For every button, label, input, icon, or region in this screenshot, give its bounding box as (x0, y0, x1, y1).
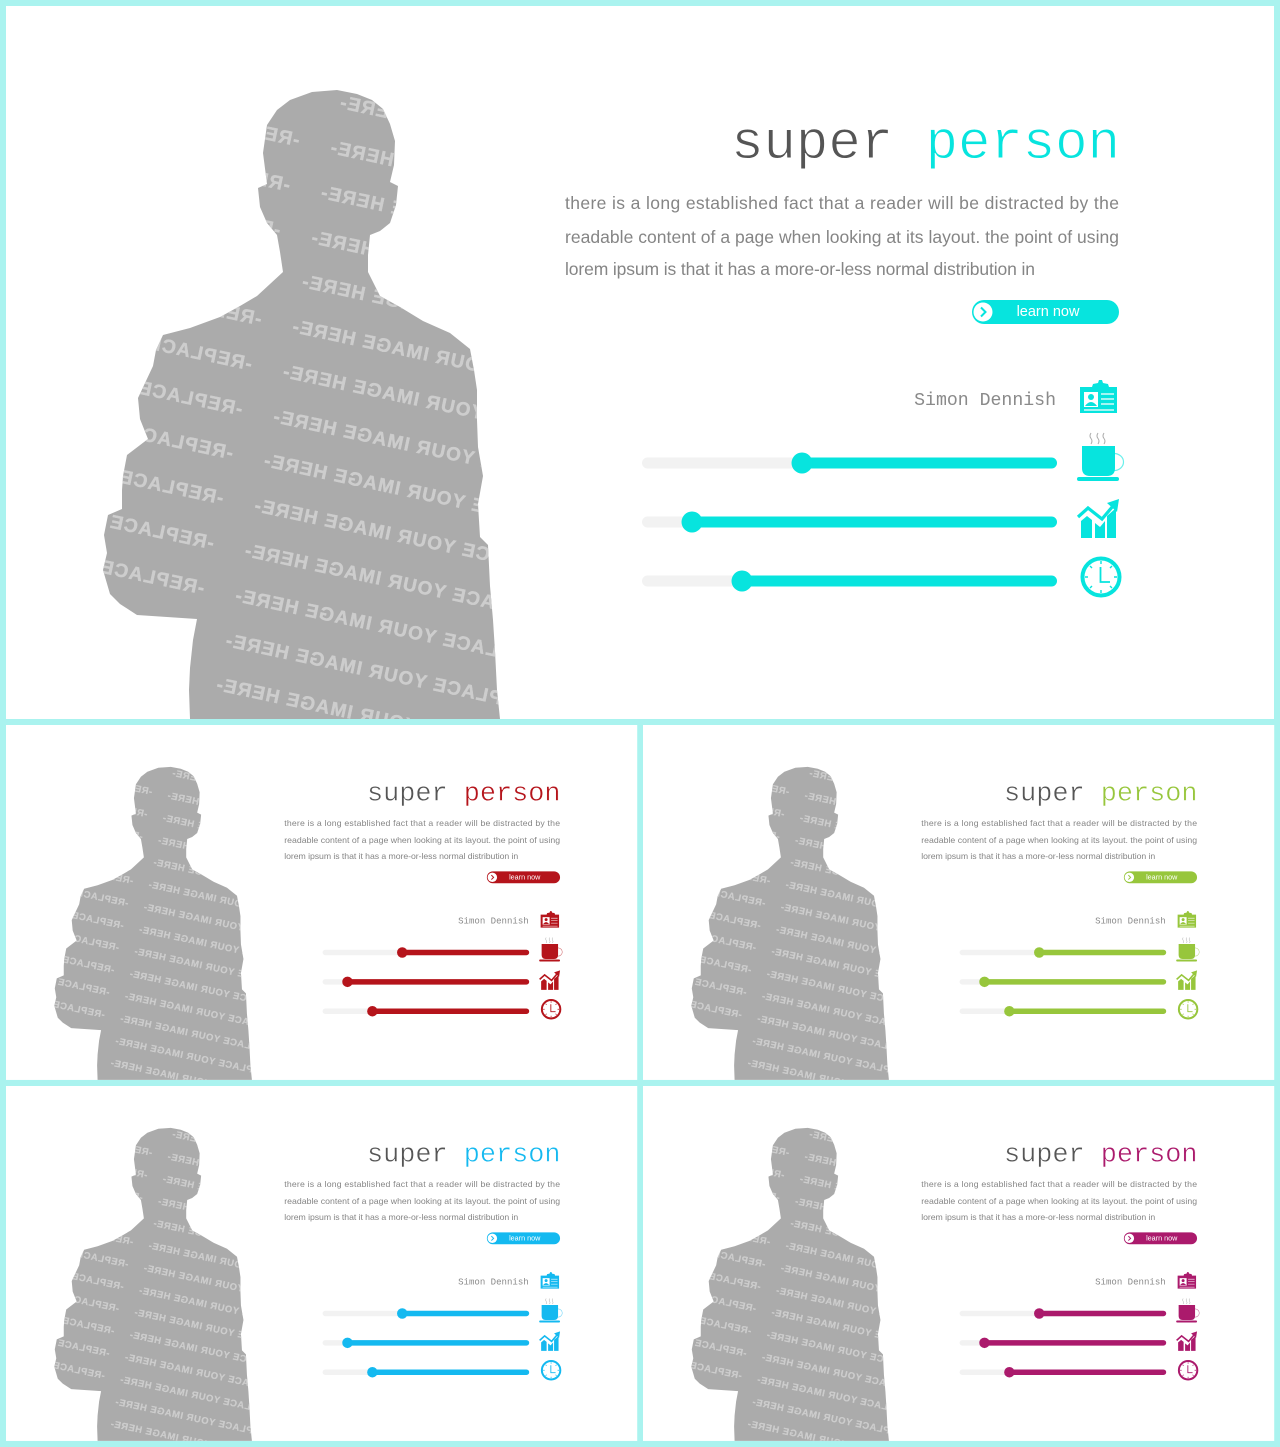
panel background (6, 6, 1274, 719)
silhouette placeholder: -REPLACE YOUR IMAGE HERE- (152, 857, 309, 901)
silhouette placeholder: -REPLACE (698, 954, 752, 976)
silhouette placeholder: -REPLACE YOUR IMAGE HERE- (171, 1129, 328, 1173)
silhouette placeholder: -REPLACE (61, 954, 115, 976)
silhouette placeholder: -REPLACE YOUR IMAGE HERE- (270, 406, 587, 493)
icon: coffee cup (539, 938, 562, 961)
silhouette placeholder: -REPLACE YOUR IMAGE HERE- (156, 1196, 314, 1240)
silhouette placeholder: -REPLACE (145, 333, 254, 375)
slider 1 (323, 947, 529, 958)
description text (921, 818, 1197, 861)
silhouette placeholder: -REPLACE YOUR IMAGE HERE- (119, 1374, 276, 1418)
silhouette placeholder: -REPLACE (136, 378, 244, 420)
icon: id badge (1178, 911, 1196, 928)
silhouette placeholder: -REPLACE (689, 999, 743, 1021)
slider 3 (642, 570, 1057, 592)
silhouette placeholder: -REPLACE (183, 154, 292, 196)
slider 2 (323, 1338, 529, 1348)
description text (565, 193, 1119, 279)
silhouette placeholder: -REPLACE (693, 1338, 748, 1359)
silhouette placeholder: -REPLACE (80, 865, 134, 887)
icon: id badge (541, 911, 559, 928)
silhouette placeholder (103, 90, 500, 719)
description text: lorem ipsum is that it has a more-or-less normal distribution in (565, 259, 1035, 279)
icon: growth chart (540, 970, 560, 990)
silhouette placeholder: -REPLACE (94, 1159, 148, 1181)
slider 1 (323, 1308, 529, 1319)
silhouette placeholder: -REPLACE YOUR IMAGE HERE- (784, 1240, 941, 1284)
description text: lorem ipsum is that it has a more-or-less normal distribution in (284, 851, 518, 861)
silhouette placeholder: -REPLACE YOUR IMAGE HERE- (793, 1196, 951, 1240)
silhouette placeholder: -REPLACE (164, 243, 273, 285)
description text: readable content of a page when looking at its layout. the point of using (284, 1196, 560, 1206)
silhouette placeholder: -REPLACE YOUR IMAGE HERE- (161, 1174, 318, 1217)
silhouette placeholder: -REPLACE YOUR IMAGE HERE- (128, 968, 285, 1012)
panel background (643, 725, 1274, 1080)
silhouette placeholder: -REPLACE (726, 821, 781, 843)
silhouette placeholder: -REPLACE YOUR IMAGE HERE- (147, 879, 304, 923)
name: Simon Dennish (1095, 1277, 1166, 1288)
title: super person (1004, 780, 1198, 810)
silhouette placeholder: -REPLACE (56, 977, 111, 998)
silhouette placeholder (54, 1128, 252, 1441)
silhouette placeholder: -REPLACE (736, 776, 790, 798)
silhouette placeholder: -REPLACE (736, 1137, 790, 1159)
description text (284, 818, 560, 861)
slider 1 (960, 1308, 1166, 1319)
silhouette placeholder: -REPLACE (693, 977, 748, 998)
icon: clock (542, 1000, 560, 1018)
silhouette placeholder: -REPLACE YOUR IMAGE HERE- (290, 316, 606, 403)
silhouette placeholder: -REPLACE (708, 910, 762, 932)
learn now button: learn now (1146, 1233, 1178, 1242)
silhouette placeholder: -REPLACE YOUR IMAGE HERE- (779, 1263, 937, 1306)
silhouette placeholder: -REPLACE (708, 1271, 762, 1293)
silhouette placeholder: -REPLACE (722, 843, 776, 865)
silhouette placeholder: -REPLACE (99, 1137, 153, 1159)
icon: id badge (1080, 380, 1117, 413)
silhouette placeholder: -REPLACE YOUR IMAGE HERE- (223, 630, 539, 717)
name: Simon Dennish (1095, 916, 1166, 927)
silhouette placeholder: -REPLACE YOUR IMAGE HERE- (793, 835, 951, 879)
silhouette placeholder: -REPLACE YOUR IMAGE HERE- (123, 1352, 281, 1396)
silhouette placeholder (691, 766, 889, 1080)
slider 3 (323, 1367, 529, 1377)
slider 1 (642, 452, 1057, 474)
panel: red slide (6, 725, 637, 1101)
panel background (6, 725, 637, 1080)
icon: coffee cup (1077, 433, 1124, 481)
silhouette placeholder: -REPLACE YOUR IMAGE HERE- (161, 813, 318, 856)
silhouette placeholder: -REPLACE (89, 1182, 144, 1204)
silhouette placeholder: -REPLACE (703, 1293, 757, 1315)
silhouette placeholder: -REPLACE (726, 1182, 781, 1204)
silhouette placeholder: -REPLACE YOUR IMAGE HERE- (213, 674, 530, 761)
icon: growth chart (1078, 499, 1119, 538)
silhouette placeholder: -REPLACE YOUR IMAGE HERE- (242, 540, 558, 627)
silhouette placeholder: -REPLACE YOUR IMAGE HERE- (765, 968, 922, 1012)
silhouette placeholder: -REPLACE YOUR IMAGE HERE- (798, 1174, 955, 1217)
description text: readable content of a page when looking at its layout. the point of using (565, 227, 1119, 247)
silhouette placeholder: -REPLACE (731, 798, 785, 820)
silhouette placeholder: -REPLACE (98, 557, 206, 599)
icon: coffee cup (539, 1299, 562, 1322)
silhouette placeholder: -REPLACE (155, 288, 264, 330)
silhouette placeholder: -REPLACE (52, 999, 106, 1021)
silhouette placeholder: -REPLACE (66, 1293, 120, 1315)
silhouette placeholder (54, 766, 252, 1080)
silhouette placeholder: -REPLACE YOUR IMAGE HERE- (775, 924, 932, 968)
silhouette placeholder: -REPLACE YOUR IMAGE HERE- (251, 495, 568, 582)
icon: clock (542, 1361, 560, 1379)
silhouette placeholder: -REPLACE YOUR IMAGE HERE- (318, 182, 634, 269)
silhouette placeholder: -REPLACE (117, 467, 226, 509)
silhouette placeholder: -REPLACE YOUR IMAGE HERE- (261, 450, 577, 537)
description text: lorem ipsum is that it has a more-or-less normal distribution in (921, 1212, 1155, 1222)
silhouette placeholder: -REPLACE YOUR IMAGE HERE- (156, 835, 314, 879)
silhouette placeholder: -REPLACE (107, 512, 216, 554)
silhouette placeholder: -REPLACE YOUR IMAGE HERE- (756, 1013, 913, 1057)
silhouette placeholder: -REPLACE YOUR IMAGE HERE- (232, 585, 549, 672)
silhouette placeholder: -REPLACE (126, 422, 235, 464)
silhouette placeholder: -REPLACE YOUR IMAGE HERE- (784, 879, 941, 923)
description text: lorem ipsum is that it has a more-or-less normal distribution in (284, 1212, 518, 1222)
description text (284, 1179, 560, 1222)
silhouette placeholder: -REPLACE YOUR IMAGE HERE- (138, 924, 295, 968)
learn now button: learn now (1146, 872, 1178, 881)
panel background (6, 1086, 637, 1441)
slider 2 (323, 977, 529, 987)
silhouette placeholder: -REPLACE YOUR IMAGE HERE- (803, 790, 960, 834)
silhouette placeholder: -REPLACE (75, 888, 129, 909)
icon: clock (1179, 1361, 1197, 1379)
description text: there is a long established fact that a reader will be distracted by the (284, 1179, 560, 1189)
silhouette placeholder: -REPLACE (717, 1226, 771, 1248)
silhouette placeholder: -REPLACE YOUR IMAGE HERE- (133, 946, 290, 990)
description text: readable content of a page when looking at its layout. the point of using (921, 1196, 1197, 1206)
description text: there is a long established fact that a reader will be distracted by the (921, 1179, 1197, 1189)
name: Simon Dennish (914, 391, 1056, 411)
silhouette placeholder: -REPLACE YOUR IMAGE HERE- (746, 1058, 903, 1101)
silhouette placeholder: -REPLACE (71, 1271, 125, 1293)
learn now button (972, 300, 1119, 324)
slider 3 (960, 1367, 1166, 1377)
silhouette placeholder: -REPLACE (703, 932, 757, 954)
icon: id badge (1178, 1272, 1196, 1289)
silhouette placeholder: -REPLACE (89, 821, 144, 843)
silhouette placeholder: -REPLACE YOUR IMAGE HERE- (138, 1285, 295, 1329)
silhouette placeholder (691, 1128, 889, 1441)
silhouette placeholder: -REPLACE YOUR IMAGE HERE- (123, 991, 281, 1035)
silhouette placeholder: -REPLACE YOUR IMAGE HERE- (808, 768, 965, 812)
title: super person (1004, 1141, 1198, 1171)
learn now button (1124, 871, 1197, 883)
silhouette placeholder: -REPLACE YOUR IMAGE HERE- (789, 857, 946, 901)
learn now button: learn now (509, 1233, 541, 1242)
slider 2 (960, 977, 1166, 987)
silhouette placeholder: -REPLACE YOUR IMAGE HERE- (171, 768, 328, 812)
silhouette placeholder: -REPLACE (174, 199, 282, 241)
silhouette placeholder: -REPLACE YOUR IMAGE HERE- (779, 902, 937, 945)
silhouette placeholder: -REPLACE YOUR IMAGE HERE- (760, 1352, 918, 1396)
silhouette placeholder: -REPLACE (717, 865, 771, 887)
silhouette placeholder: -REPLACE YOUR IMAGE HERE- (133, 1307, 290, 1351)
silhouette placeholder: -REPLACE (689, 1360, 743, 1382)
silhouette placeholder: -REPLACE (61, 1315, 115, 1337)
silhouette placeholder: -REPLACE YOUR IMAGE HERE- (760, 991, 918, 1035)
silhouette placeholder: -REPLACE (193, 109, 302, 151)
panel: large cyan slide (6, 6, 1274, 761)
silhouette placeholder: -REPLACE YOUR IMAGE HERE- (765, 1329, 922, 1373)
title: super person (367, 780, 561, 810)
panel: green slide (643, 725, 1274, 1101)
silhouette placeholder: -REPLACE YOUR IMAGE HERE- (280, 361, 596, 448)
silhouette placeholder: -REPLACE YOUR IMAGE HERE- (803, 1151, 960, 1195)
silhouette placeholder: -REPLACE YOUR IMAGE HERE- (299, 271, 615, 358)
title: super person (367, 1141, 561, 1171)
silhouette placeholder: -REPLACE (75, 1249, 129, 1270)
learn now button (487, 1232, 560, 1244)
silhouette placeholder: -REPLACE (731, 1159, 785, 1181)
slider 1 (960, 947, 1166, 958)
icon: growth chart (540, 1331, 560, 1351)
silhouette placeholder: -REPLACE YOUR IMAGE HERE- (308, 227, 625, 314)
description text: there is a long established fact that a reader will be distracted by the (284, 818, 560, 828)
silhouette placeholder: -REPLACE YOUR IMAGE HERE- (166, 790, 323, 834)
silhouette placeholder: -REPLACE YOUR IMAGE HERE- (789, 1218, 946, 1262)
title: super person (731, 114, 1120, 175)
silhouette placeholder: -REPLACE YOUR IMAGE HERE- (142, 1263, 300, 1306)
name: Simon Dennish (458, 1277, 529, 1288)
icon: coffee cup (1176, 1299, 1199, 1322)
silhouette placeholder: -REPLACE YOUR IMAGE HERE- (114, 1397, 271, 1440)
slider 3 (323, 1006, 529, 1016)
silhouette placeholder: -REPLACE YOUR IMAGE HERE- (109, 1058, 266, 1101)
silhouette placeholder: -REPLACE YOUR IMAGE HERE- (798, 813, 955, 856)
silhouette placeholder: -REPLACE YOUR IMAGE HERE- (328, 137, 644, 224)
slider 2 (960, 1338, 1166, 1348)
silhouette placeholder: -REPLACE YOUR IMAGE HERE- (775, 1285, 932, 1329)
silhouette placeholder: -REPLACE (712, 888, 766, 909)
silhouette placeholder: -REPLACE (698, 1315, 752, 1337)
learn now button: learn now (1017, 304, 1080, 320)
silhouette placeholder: -REPLACE YOUR IMAGE HERE- (756, 1374, 913, 1418)
panel: blue slide (6, 1086, 637, 1447)
icon: clock (1082, 558, 1120, 596)
silhouette placeholder: -REPLACE YOUR IMAGE HERE- (142, 902, 300, 945)
silhouette placeholder: -REPLACE (99, 776, 153, 798)
silhouette placeholder: -REPLACE YOUR IMAGE HERE- (147, 1240, 304, 1284)
slider 3 (960, 1006, 1166, 1016)
description text: readable content of a page when looking at its layout. the point of using (921, 835, 1197, 845)
description text (921, 1179, 1197, 1222)
slider 2 (642, 512, 1057, 532)
silhouette placeholder: -REPLACE (85, 1204, 139, 1226)
silhouette placeholder: -REPLACE (52, 1360, 106, 1382)
description text: lorem ipsum is that it has a more-or-less normal distribution in (921, 851, 1155, 861)
silhouette placeholder: -REPLACE YOUR IMAGE HERE- (770, 1307, 927, 1351)
panel: magenta slide (643, 1086, 1274, 1447)
silhouette placeholder: -REPLACE YOUR IMAGE HERE- (751, 1397, 908, 1440)
learn now button: learn now (509, 872, 541, 881)
learn now button (1124, 1232, 1197, 1244)
description text: there is a long established fact that a reader will be distracted by the (921, 818, 1197, 828)
silhouette placeholder: -REPLACE (94, 798, 148, 820)
name: Simon Dennish (458, 916, 529, 927)
silhouette placeholder: -REPLACE YOUR IMAGE HERE- (808, 1129, 965, 1173)
silhouette placeholder: -REPLACE YOUR IMAGE HERE- (337, 92, 653, 179)
silhouette placeholder: -REPLACE YOUR IMAGE HERE- (166, 1151, 323, 1195)
description text: readable content of a page when looking at its layout. the point of using (284, 835, 560, 845)
silhouette placeholder: -REPLACE YOUR IMAGE HERE- (751, 1036, 908, 1079)
icon: growth chart (1177, 970, 1197, 990)
silhouette placeholder: -REPLACE YOUR IMAGE HERE- (128, 1329, 285, 1373)
silhouette placeholder: -REPLACE YOUR IMAGE HERE- (152, 1218, 309, 1262)
silhouette placeholder: -REPLACE (56, 1338, 111, 1359)
silhouette placeholder: -REPLACE (80, 1226, 134, 1248)
silhouette placeholder: -REPLACE (66, 932, 120, 954)
icon: coffee cup (1176, 938, 1199, 961)
silhouette placeholder: -REPLACE (712, 1249, 766, 1270)
silhouette placeholder: -REPLACE (722, 1204, 776, 1226)
silhouette placeholder: -REPLACE YOUR IMAGE HERE- (770, 946, 927, 990)
panel background (643, 1086, 1274, 1441)
icon: growth chart (1177, 1331, 1197, 1351)
learn now button (487, 871, 560, 883)
description text: there is a long established fact that a reader will be distracted by the (565, 193, 1119, 213)
silhouette placeholder: -REPLACE (71, 910, 125, 932)
icon: id badge (541, 1272, 559, 1289)
icon: clock (1179, 1000, 1197, 1018)
silhouette placeholder: -REPLACE (85, 843, 139, 865)
silhouette placeholder: -REPLACE YOUR IMAGE HERE- (119, 1013, 276, 1057)
silhouette placeholder: -REPLACE YOUR IMAGE HERE- (114, 1036, 271, 1079)
